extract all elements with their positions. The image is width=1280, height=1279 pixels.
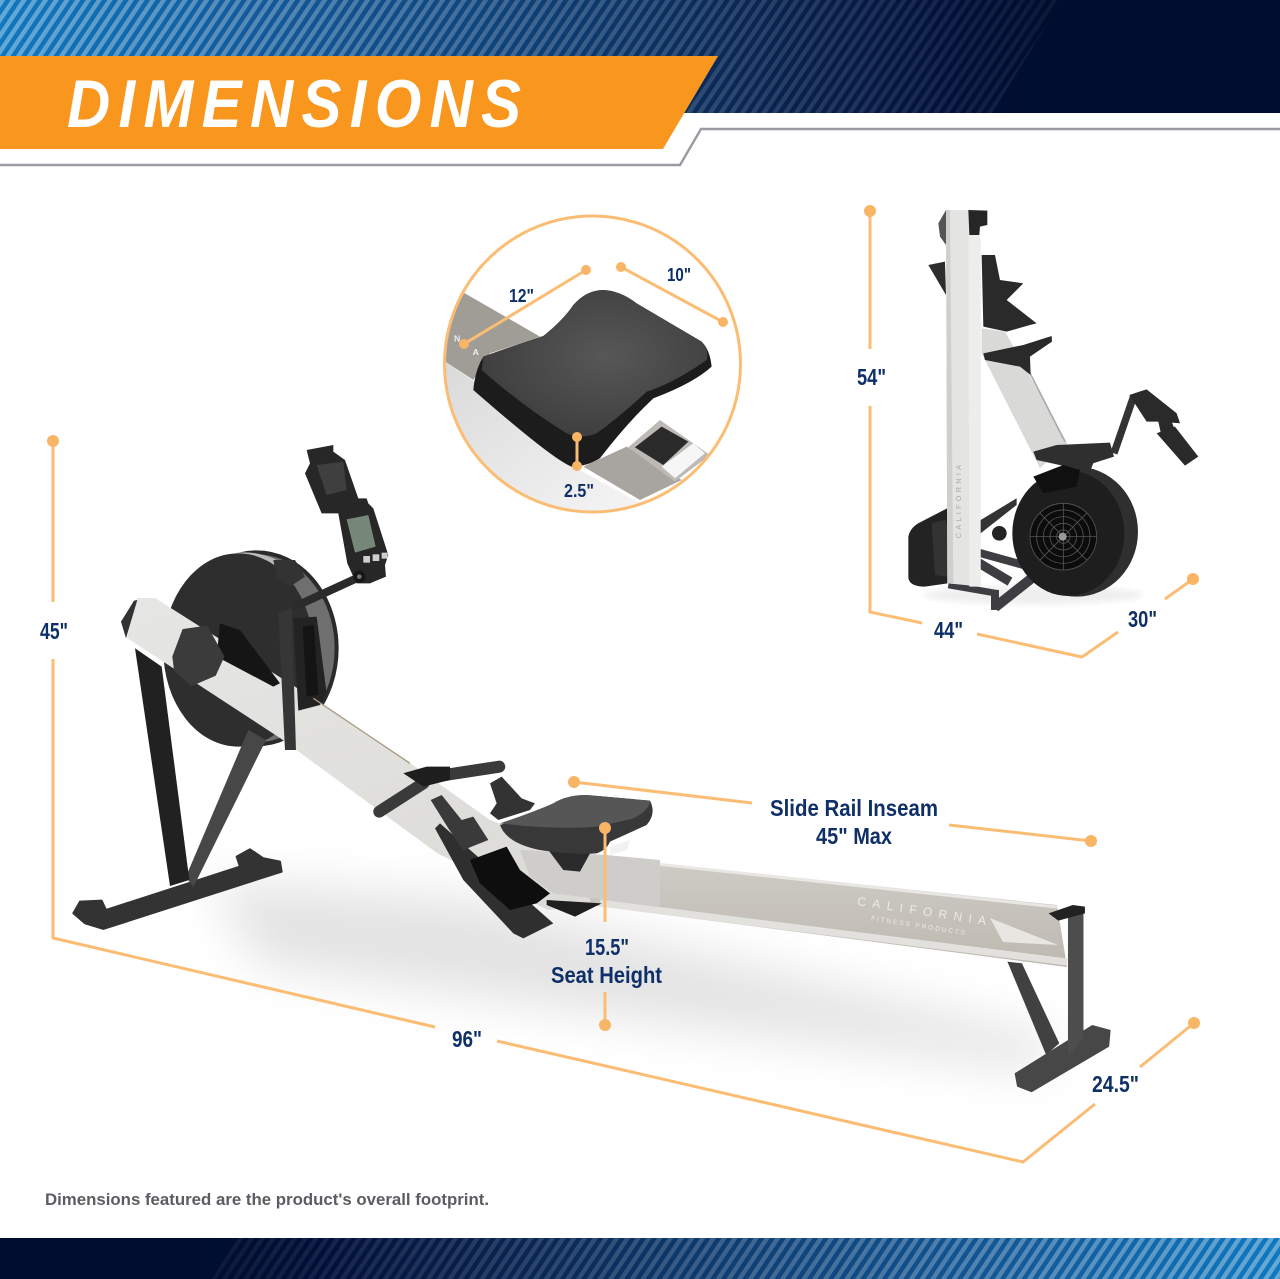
dimension: 24.5 inch width [1092, 1017, 1200, 1097]
dimension: seat height: 15.5" [585, 934, 629, 960]
seat close-up circle: N [454, 334, 460, 344]
measure: 2.5 inch [564, 432, 594, 501]
rail branding: CALIFORNIA [857, 894, 987, 928]
measure: 12 inch [459, 265, 591, 349]
rower: folded upright view [908, 210, 1198, 610]
label: 54: 54" [857, 364, 886, 390]
header band [0, 0, 1280, 113]
title: DIMENSIONS [67, 65, 521, 142]
monitor [305, 445, 388, 583]
dimension: seat height: Seat Height [551, 962, 662, 988]
foot plates [928, 262, 946, 295]
dimension: 45 inch height and 96 inch length [40, 435, 1095, 1162]
seat close-up circle: A [473, 347, 480, 357]
arm and bracket [1033, 443, 1114, 472]
dimension: 24.5 inch width: 24.5" [1092, 1071, 1139, 1097]
dimension: seat height [551, 822, 662, 1031]
floor shadow [210, 880, 1060, 1070]
measure: 12 inch: 12" [509, 286, 534, 306]
handle [983, 336, 1052, 375]
rear leg [1007, 905, 1111, 1092]
folded rail [982, 328, 1067, 468]
header outline rule [0, 129, 1280, 165]
dimension: slide rail inseam: 45" Max [816, 823, 892, 849]
label: 45: 45" [40, 618, 68, 644]
rower: main side view [73, 445, 1111, 1092]
seat on end [908, 508, 948, 587]
dimension: slide rail inseam: Slide Rail Inseam [770, 795, 938, 821]
rail branding: FITNESS PRODUCTS [871, 915, 966, 937]
wheel bar [981, 498, 1017, 533]
rail in close-up [446, 362, 639, 510]
dimension: slide rail inseam [568, 776, 1097, 849]
footer band [0, 1238, 1280, 1279]
measure: 10 inch: 10" [667, 265, 691, 285]
foot plates, seat and carriage [431, 777, 660, 938]
label: 30: 30" [1128, 606, 1157, 632]
shadow [923, 586, 1143, 604]
seat in close-up [473, 290, 712, 467]
rear foot and legs [73, 648, 282, 929]
tower [946, 210, 981, 587]
fan grille [1030, 503, 1097, 570]
seat close-up circle [440, 210, 750, 520]
dimensions: upright view [857, 205, 1199, 657]
top cap [968, 210, 987, 235]
flywheel [163, 552, 337, 747]
footnote: Dimensions featured are the product's overall footprint. [45, 1190, 489, 1209]
label: 44: 44" [934, 617, 963, 643]
monitor [1129, 389, 1180, 423]
rail [127, 598, 1067, 967]
right foot plate and strap [982, 255, 1037, 332]
base frame [948, 552, 1032, 610]
label: 96: 96" [452, 1026, 482, 1052]
orange title banner [0, 56, 718, 149]
flywheel [1015, 467, 1138, 597]
branding on tower: CALIFORNIA [954, 465, 963, 538]
front cap, block and bracket [121, 578, 410, 763]
measure: 10 inch [616, 262, 728, 327]
measure: 2.5 inch: 2.5" [564, 481, 594, 501]
handle [379, 767, 499, 812]
